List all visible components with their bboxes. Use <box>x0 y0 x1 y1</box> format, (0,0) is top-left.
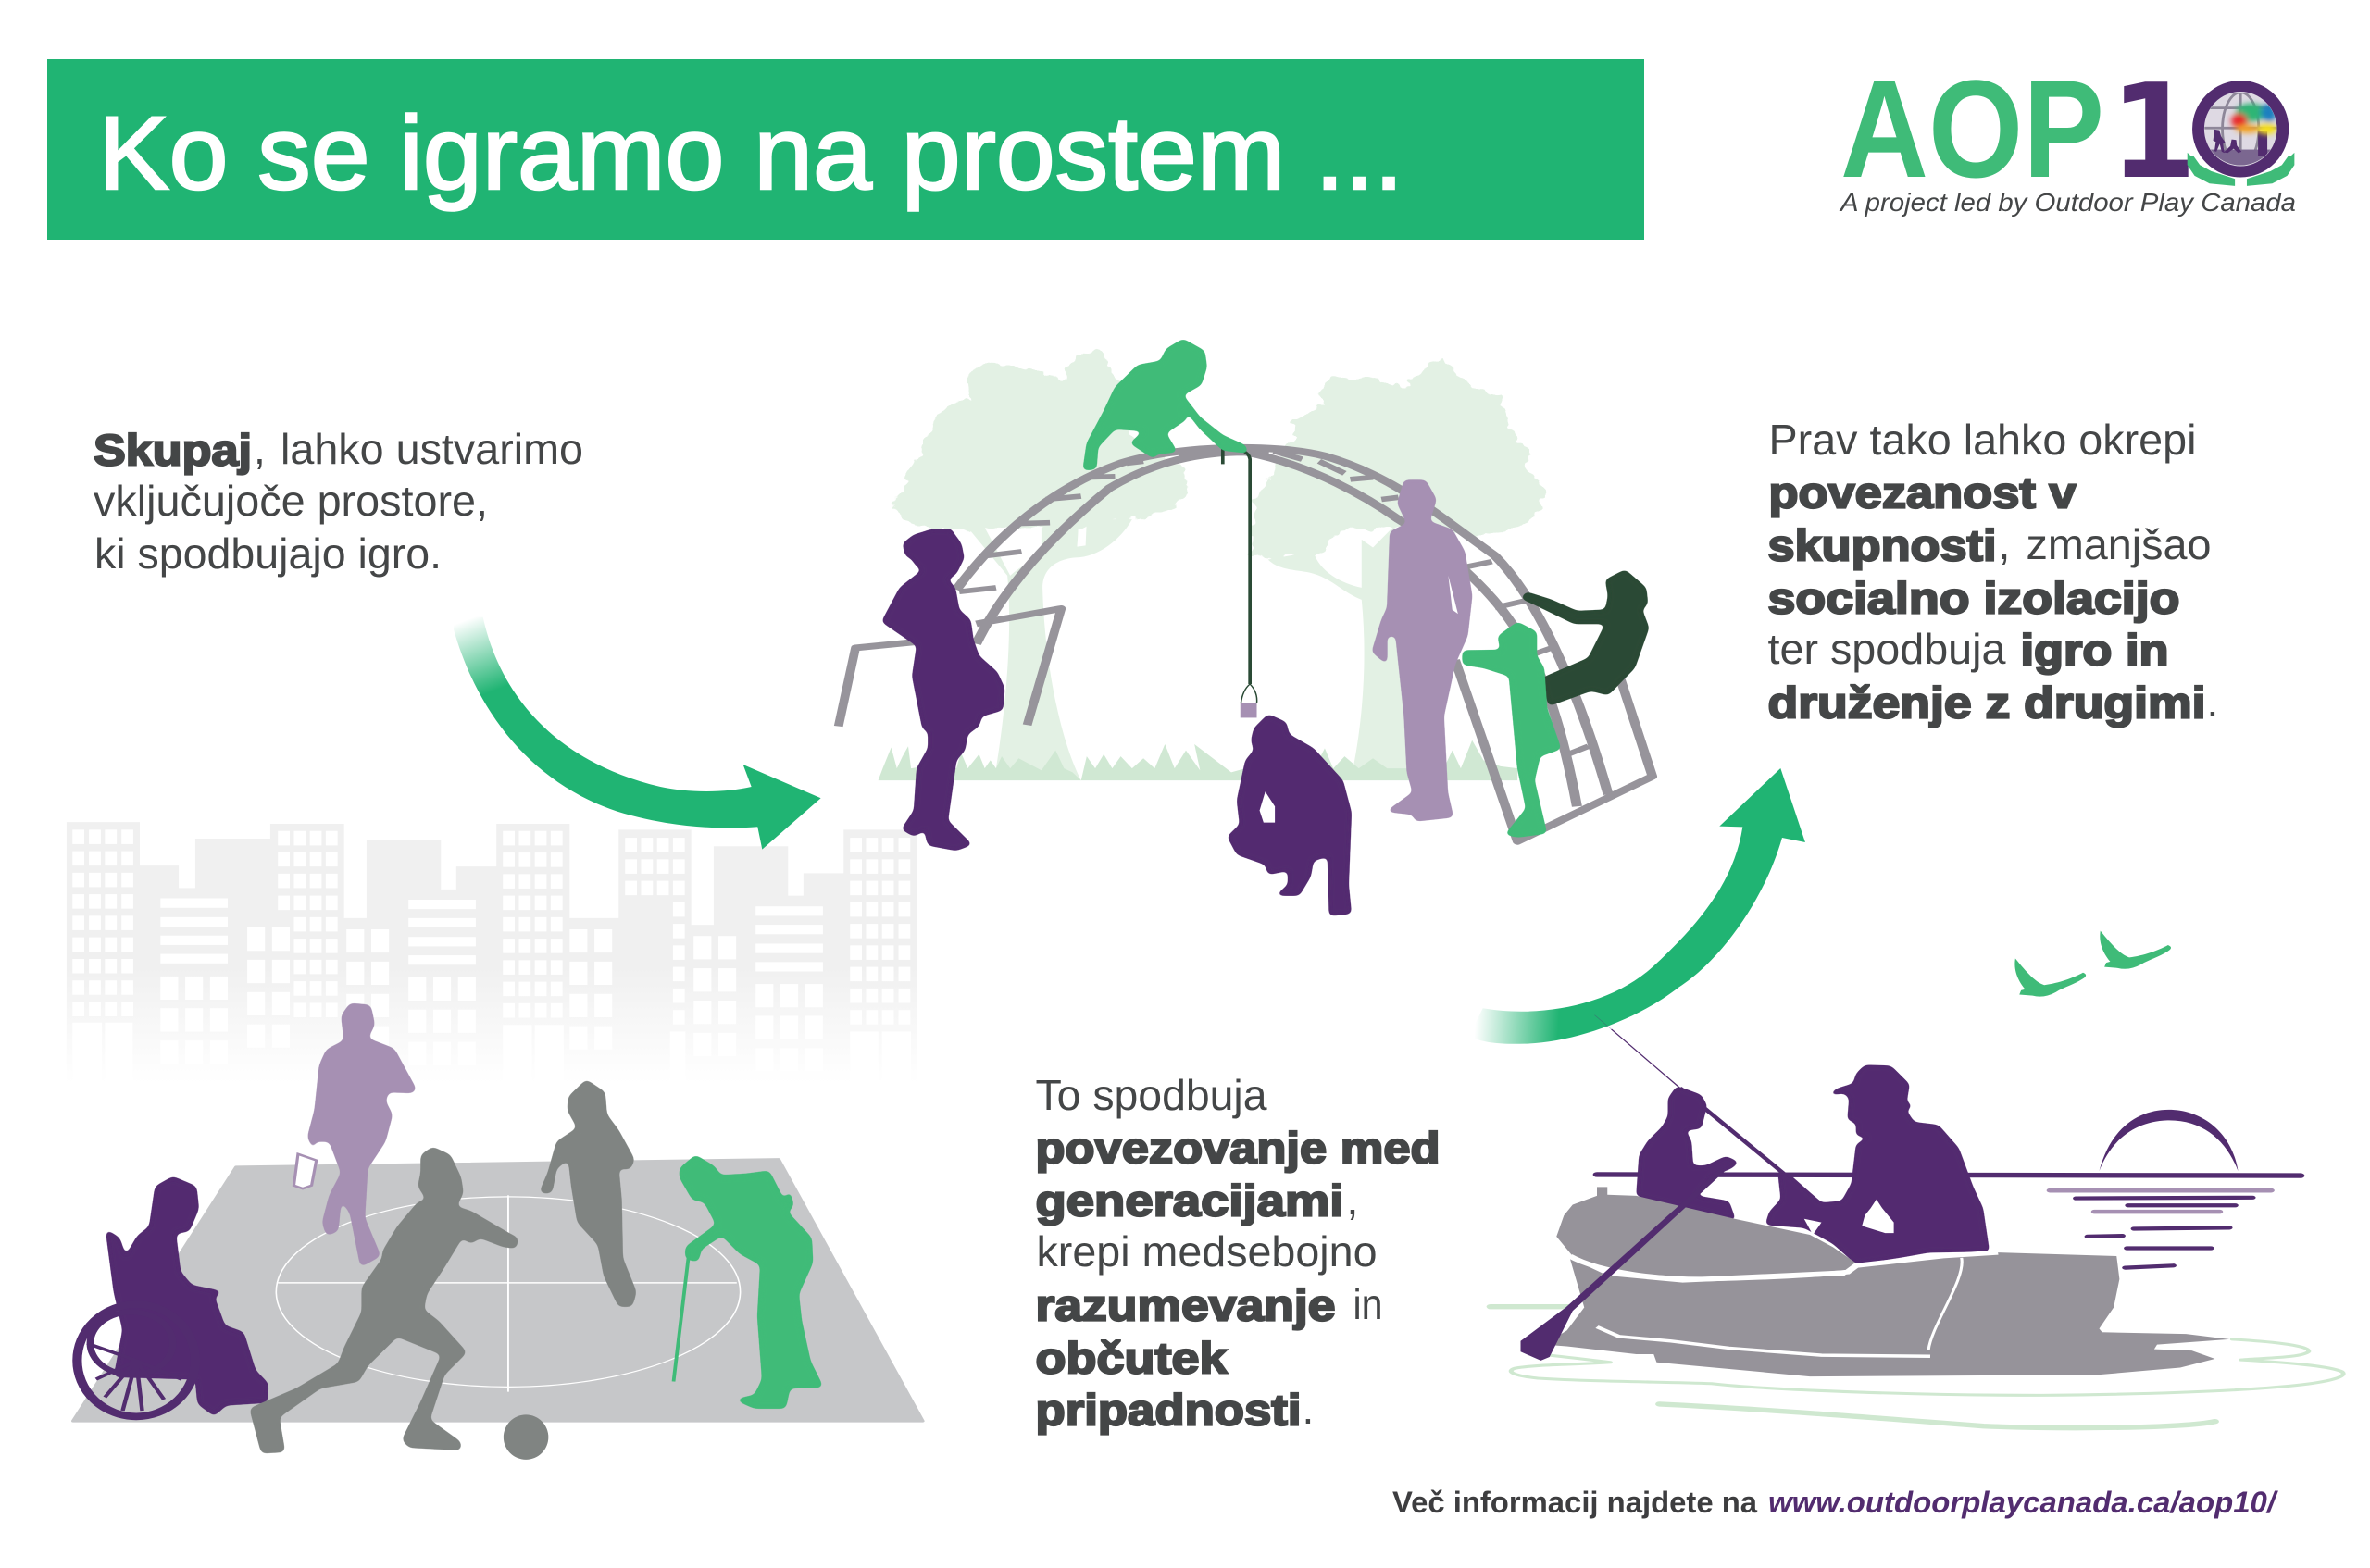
figure: adult in boat <box>1765 1065 1990 1264</box>
hanging rope with bucket <box>1223 449 1257 717</box>
text block: generations <box>1035 1071 1441 1435</box>
text block: community: . <box>2207 678 2218 726</box>
figure: child in boat <box>1637 1086 1739 1221</box>
title banner <box>47 59 1644 240</box>
panel: city and court scene <box>67 822 923 1460</box>
text block: generations: pripadnosti <box>1035 1385 1302 1435</box>
text block: together <box>94 425 583 578</box>
figure: crouching adult <box>1228 715 1352 916</box>
climbing arch frame <box>839 448 1653 841</box>
fishing rod <box>1612 1029 1679 1088</box>
text block: community: igro in <box>2020 626 2168 674</box>
figure: pregnant mother <box>881 529 1004 851</box>
footer: more information link <box>1392 1486 2278 1519</box>
arrow: boat to community text <box>1469 768 1805 1044</box>
text block: community: , <box>1998 520 2010 568</box>
text block: community: zmanjšao <box>2026 520 2211 568</box>
city skyline <box>67 822 917 1083</box>
text block: community: socialno izolacijo <box>1768 574 2179 622</box>
figure: green child on ladder <box>1463 622 1561 838</box>
panel: playground scene <box>839 339 1653 916</box>
figure: woman with paddle <box>293 1003 417 1267</box>
ball <box>504 1414 548 1460</box>
figure: running child <box>539 1079 636 1307</box>
panel: fishing boat scene <box>1491 931 2343 1428</box>
text block: generations: . <box>1302 1385 1314 1433</box>
text block: generations: krepi medsebojno <box>1037 1227 1378 1276</box>
figure: standing adult <box>1372 480 1472 821</box>
text block: generations: in <box>1353 1280 1383 1328</box>
logo letters AOP: AOP <box>1840 51 2104 206</box>
fishing rod handle <box>1679 1088 1822 1204</box>
text block: together: , <box>254 425 266 473</box>
text block: together: lahko ustvarimo <box>281 425 583 473</box>
water reflections <box>2050 1190 2271 1268</box>
text block: generations: To spodbuja <box>1035 1071 1267 1119</box>
text block: community: druženje z drugimi <box>1768 678 2205 728</box>
figure: running kicker <box>250 1147 518 1453</box>
footer: more information link: www.outdoorplaycanada.ca/aop10/ <box>1768 1486 2278 1519</box>
fishing rod tip <box>1594 1015 1612 1029</box>
text block: together: ki spodbujajo igro. <box>94 529 442 578</box>
logo: AOP10 <box>1839 80 2295 217</box>
water ripples <box>1491 1307 2343 1428</box>
figure: dark climbing child <box>1521 569 1649 706</box>
logo tagline: A project led by Outdoor Play Canada <box>1839 188 2296 217</box>
text block: community: povezanost v <box>1768 468 2076 516</box>
text block: community: ter spodbuja <box>1768 625 2006 673</box>
play court <box>73 1160 923 1421</box>
figure: elder with cane <box>674 1155 824 1409</box>
text block: together: vključujoče prostore, <box>94 477 488 525</box>
trees and grass <box>879 351 1545 780</box>
oar <box>1520 1168 1726 1361</box>
logo numeral 1: 1 <box>2110 56 2197 208</box>
figure: person in wheelchair <box>77 1176 268 1416</box>
boat hull <box>1544 1187 2229 1376</box>
text block: generations: generacijami <box>1035 1176 1344 1226</box>
text block: generations: razumevanje <box>1035 1281 1335 1329</box>
birds <box>2014 931 2171 997</box>
title text: Ko se igramo na prostem ... <box>98 95 1403 211</box>
text block: community: skupnosti <box>1768 520 1996 570</box>
logo emblem: globe, tree and hands <box>2188 86 2294 186</box>
text block: together: Skupaj <box>94 426 252 474</box>
text block: community: Prav tako lahko okrepi <box>1768 416 2196 464</box>
text block: community <box>1768 416 2218 728</box>
figure: climbing girl <box>1083 339 1248 470</box>
text block: generations: , <box>1346 1176 1358 1224</box>
text block: generations: povezovanje med <box>1035 1124 1441 1172</box>
text block: generations: občutek <box>1035 1333 1228 1383</box>
footer: more information link: Več informacij najdete na <box>1392 1486 1757 1519</box>
horizon and sun <box>1597 1110 2301 1176</box>
arrow: city to playground <box>454 616 821 850</box>
